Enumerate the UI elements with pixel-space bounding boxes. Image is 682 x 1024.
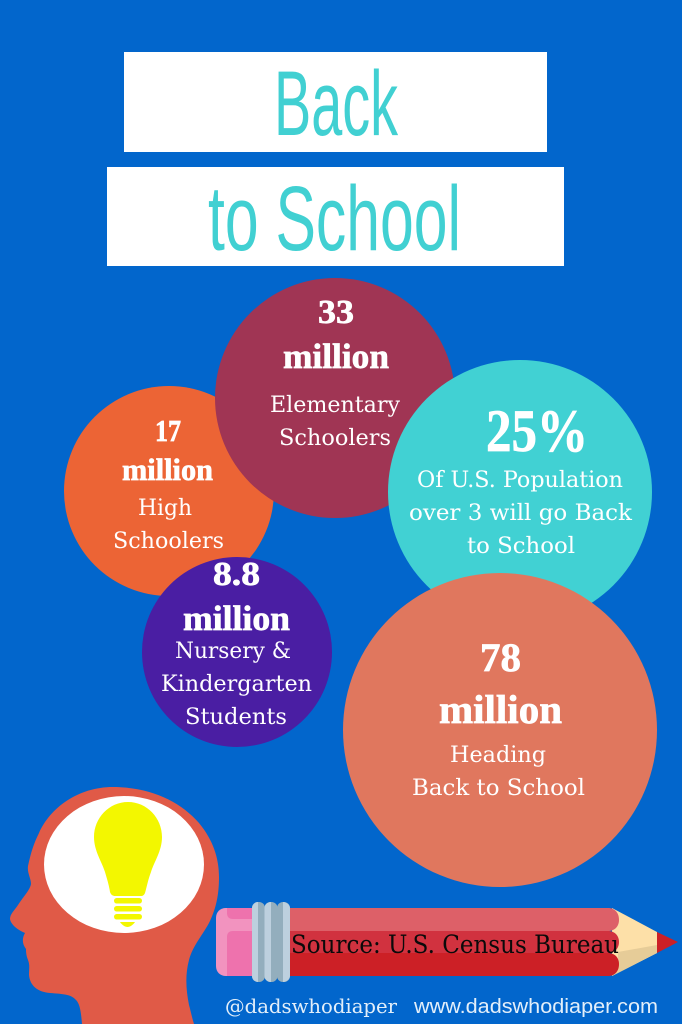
source label: Source: U.S. Census Bureau (291, 930, 619, 959)
circle: 78 million: Back to School (412, 776, 585, 801)
icon: pencil (216, 902, 678, 982)
circle: elementary schoolers (215, 278, 455, 518)
title (107, 52, 564, 270)
circle: 25 percent: 25% (486, 398, 588, 464)
pencil tip (612, 908, 678, 976)
circle: elementary schoolers: 33 (318, 294, 354, 331)
circle: nursery and kindergarten: Students (185, 705, 287, 730)
circle: high schoolers: 17 (155, 413, 181, 448)
circle: 25 percent (388, 360, 652, 624)
circle: nursery and kindergarten: Kindergarten (161, 672, 312, 697)
circle: high schoolers: million (122, 452, 213, 487)
title: to School (208, 168, 461, 270)
circle: elementary schoolers: Elementary (270, 393, 401, 418)
circle: elementary schoolers: million (283, 337, 389, 376)
bulb glass (94, 802, 162, 896)
head cutout (44, 796, 204, 933)
circle: nursery and kindergarten: million (183, 599, 290, 638)
bulb base (114, 898, 142, 927)
circle: 78 million: Heading (450, 743, 546, 768)
pencil body (280, 908, 619, 976)
eraser (216, 908, 255, 976)
circle: elementary schoolers: Schoolers (279, 426, 391, 451)
circle: nursery and kindergarten: 8.8 (213, 556, 260, 593)
circle: high schoolers (64, 386, 274, 596)
title: Back (274, 53, 399, 155)
circle: 78 million: 78 (480, 635, 521, 680)
circle: 25 percent: to School (467, 534, 575, 559)
icon: head with light bulb (10, 787, 219, 1024)
circle: 78 million (343, 573, 657, 887)
ferrule (252, 902, 290, 982)
circle: high schoolers: High (138, 496, 192, 521)
circle: nursery and kindergarten: Nursery & (175, 639, 291, 664)
circle: high schoolers: Schoolers (113, 529, 224, 554)
circle: 78 million: million (439, 687, 562, 732)
circle: 25 percent: over 3 will go Back (409, 501, 633, 526)
footer handle: @dadswhodiaper (225, 994, 397, 1018)
circle: 25 percent: Of U.S. Population (417, 468, 623, 493)
circle: nursery and kindergarten (142, 556, 332, 747)
footer website: www.dadswhodiaper.com (413, 996, 658, 1018)
